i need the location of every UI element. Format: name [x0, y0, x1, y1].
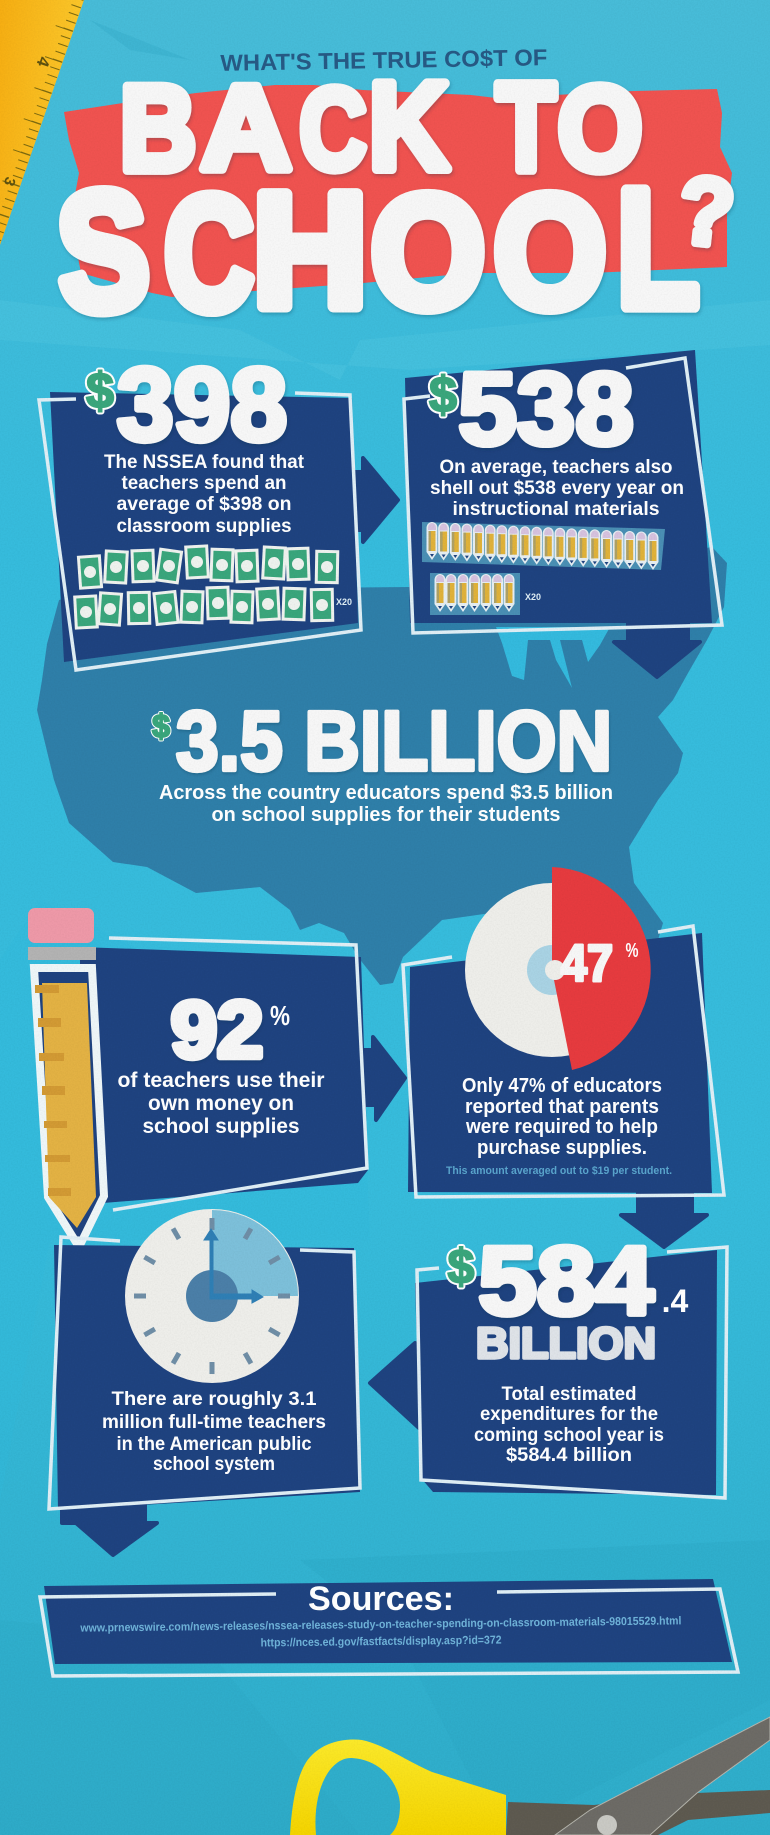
title: back to school: B — [120, 61, 196, 197]
description: expenditures for the — [480, 1404, 658, 1425]
number 398: 398 — [117, 347, 287, 462]
panel: $584.4 billion — [415, 1228, 727, 1498]
stat: $3.5 billion — [152, 695, 613, 826]
arrow: 92% to 47% — [360, 1037, 405, 1120]
title: back to school: O — [558, 62, 642, 196]
description: on school supplies for their students — [212, 804, 560, 826]
frame — [49, 1237, 360, 1509]
percent sign: % — [270, 1000, 290, 1031]
description: teachers spend an — [122, 473, 286, 494]
panel: 47% — [403, 867, 724, 1197]
description: purchase supplies. — [477, 1137, 647, 1159]
title: back to school: O — [371, 162, 485, 341]
frame — [417, 1247, 727, 1498]
dollar sign: $ — [448, 1241, 475, 1294]
panel: $398 — [39, 347, 361, 670]
pencil body — [42, 983, 96, 1228]
description — [462, 1075, 662, 1159]
dollar sign: $ — [86, 363, 114, 419]
arrow: clock down — [62, 1500, 157, 1555]
number: 3.5 BILLION — [176, 695, 612, 789]
billion: BILLION — [476, 1319, 656, 1368]
description: There are roughly 3.1 — [112, 1389, 317, 1410]
frame — [109, 938, 367, 1210]
screw — [597, 1815, 617, 1835]
description: million full-time teachers — [102, 1412, 326, 1433]
title: back to school: S — [53, 156, 153, 348]
icon: scissors — [290, 1717, 770, 1835]
icon: pencil — [28, 908, 104, 1247]
number 47: 47 — [561, 934, 613, 993]
title: back to school: K — [369, 56, 449, 195]
pencil strip — [422, 522, 665, 570]
description: classroom supplies — [116, 516, 292, 537]
ferrule — [28, 947, 96, 960]
title: back to school — [53, 56, 739, 348]
title: back to school: C — [164, 162, 254, 344]
ruler: 3 — [0, 175, 19, 188]
dollar sign: $ — [152, 708, 170, 744]
description: of teachers use their — [118, 1069, 324, 1092]
eraser — [28, 908, 94, 943]
pie chart — [465, 867, 651, 1070]
arrow: 584 to clock — [370, 1343, 430, 1428]
clock — [125, 1209, 299, 1383]
description: Total estimated — [502, 1384, 636, 1405]
dollar sign: $ — [429, 367, 457, 423]
panel: sources — [40, 1579, 738, 1676]
decimal: .4 — [662, 1283, 689, 1319]
title: what's the true cost of: WHAT'S THE TRUE CO$T OF — [220, 44, 548, 76]
dollar sign: $ — [448, 1241, 475, 1294]
ruler — [0, 0, 84, 245]
panel: teachers — [49, 1209, 360, 1510]
arrow: panel 1 to panel 2 — [350, 458, 398, 542]
description: $584.4 billion — [506, 1445, 632, 1466]
heading: Sources: — [308, 1580, 454, 1618]
description — [430, 457, 684, 520]
description — [474, 1384, 664, 1466]
dollar sign: $ — [152, 708, 170, 744]
title: back to school: L — [617, 156, 699, 342]
US map — [37, 547, 727, 985]
links: www.prnewswire.com/news-releases/nssea-releases-study-on-teacher-spending-on-classroom-materials-98015529.html — [79, 1615, 681, 1635]
footnote: This amount averaged out to $19 per student. — [446, 1165, 672, 1177]
description: coming school year is — [474, 1425, 664, 1446]
description: shell out $538 every year on — [430, 478, 684, 499]
description: Across the country educators spend $3.5 billion — [159, 782, 613, 804]
red torn paper — [64, 85, 732, 297]
title: back to school: H — [253, 161, 367, 341]
arrow: 47% down — [621, 1190, 707, 1247]
description: school supplies — [142, 1115, 300, 1138]
number 538: 538 — [458, 351, 634, 466]
description: reported that parents — [465, 1096, 659, 1118]
x20 label: X20 — [336, 597, 352, 607]
lower blade — [506, 1790, 770, 1835]
description: On average, teachers also — [440, 457, 672, 478]
description: school system — [153, 1454, 275, 1475]
percent sign: % — [626, 940, 639, 962]
description — [104, 452, 305, 537]
ruler: 4 — [33, 54, 54, 70]
description: The NSSEA found that — [104, 452, 305, 473]
links — [79, 1615, 682, 1652]
description: own money on — [148, 1092, 294, 1115]
description: in the American public — [116, 1434, 312, 1455]
panel: 92% — [80, 938, 368, 1210]
description: instructional materials — [452, 499, 660, 520]
description: average of $398 on — [116, 494, 292, 515]
x20 label: X20 — [525, 592, 541, 602]
description — [159, 782, 613, 826]
number 584: 584 — [478, 1228, 654, 1335]
title: back to school: C — [299, 65, 367, 194]
number 92: 92 — [171, 985, 263, 1075]
frame — [40, 1589, 738, 1676]
panel: $538 — [404, 350, 722, 633]
dollar sign: $ — [429, 367, 457, 423]
title: back to school: A — [201, 62, 291, 195]
frame — [404, 358, 722, 633]
arrow: panel 2 down — [614, 620, 700, 677]
title: back to school: T — [496, 58, 556, 197]
money bills — [73, 544, 339, 630]
description: were required to help — [465, 1116, 658, 1138]
second pencil strip — [430, 573, 520, 615]
dollar sign: $ — [86, 363, 114, 419]
title: back to school: O — [494, 163, 606, 342]
frame — [403, 926, 724, 1197]
description — [102, 1389, 326, 1475]
handle — [290, 1740, 506, 1835]
pencil outline — [34, 968, 104, 1247]
pencil tabs — [35, 985, 71, 1196]
description: Only 47% of educators — [462, 1075, 662, 1097]
links: https://nces.ed.gov/fastfacts/display.asp?id=372 — [261, 1635, 502, 1649]
frame — [39, 393, 361, 670]
upper blade — [555, 1717, 770, 1835]
description — [118, 1069, 324, 1138]
title: back to school: ? — [674, 155, 739, 267]
